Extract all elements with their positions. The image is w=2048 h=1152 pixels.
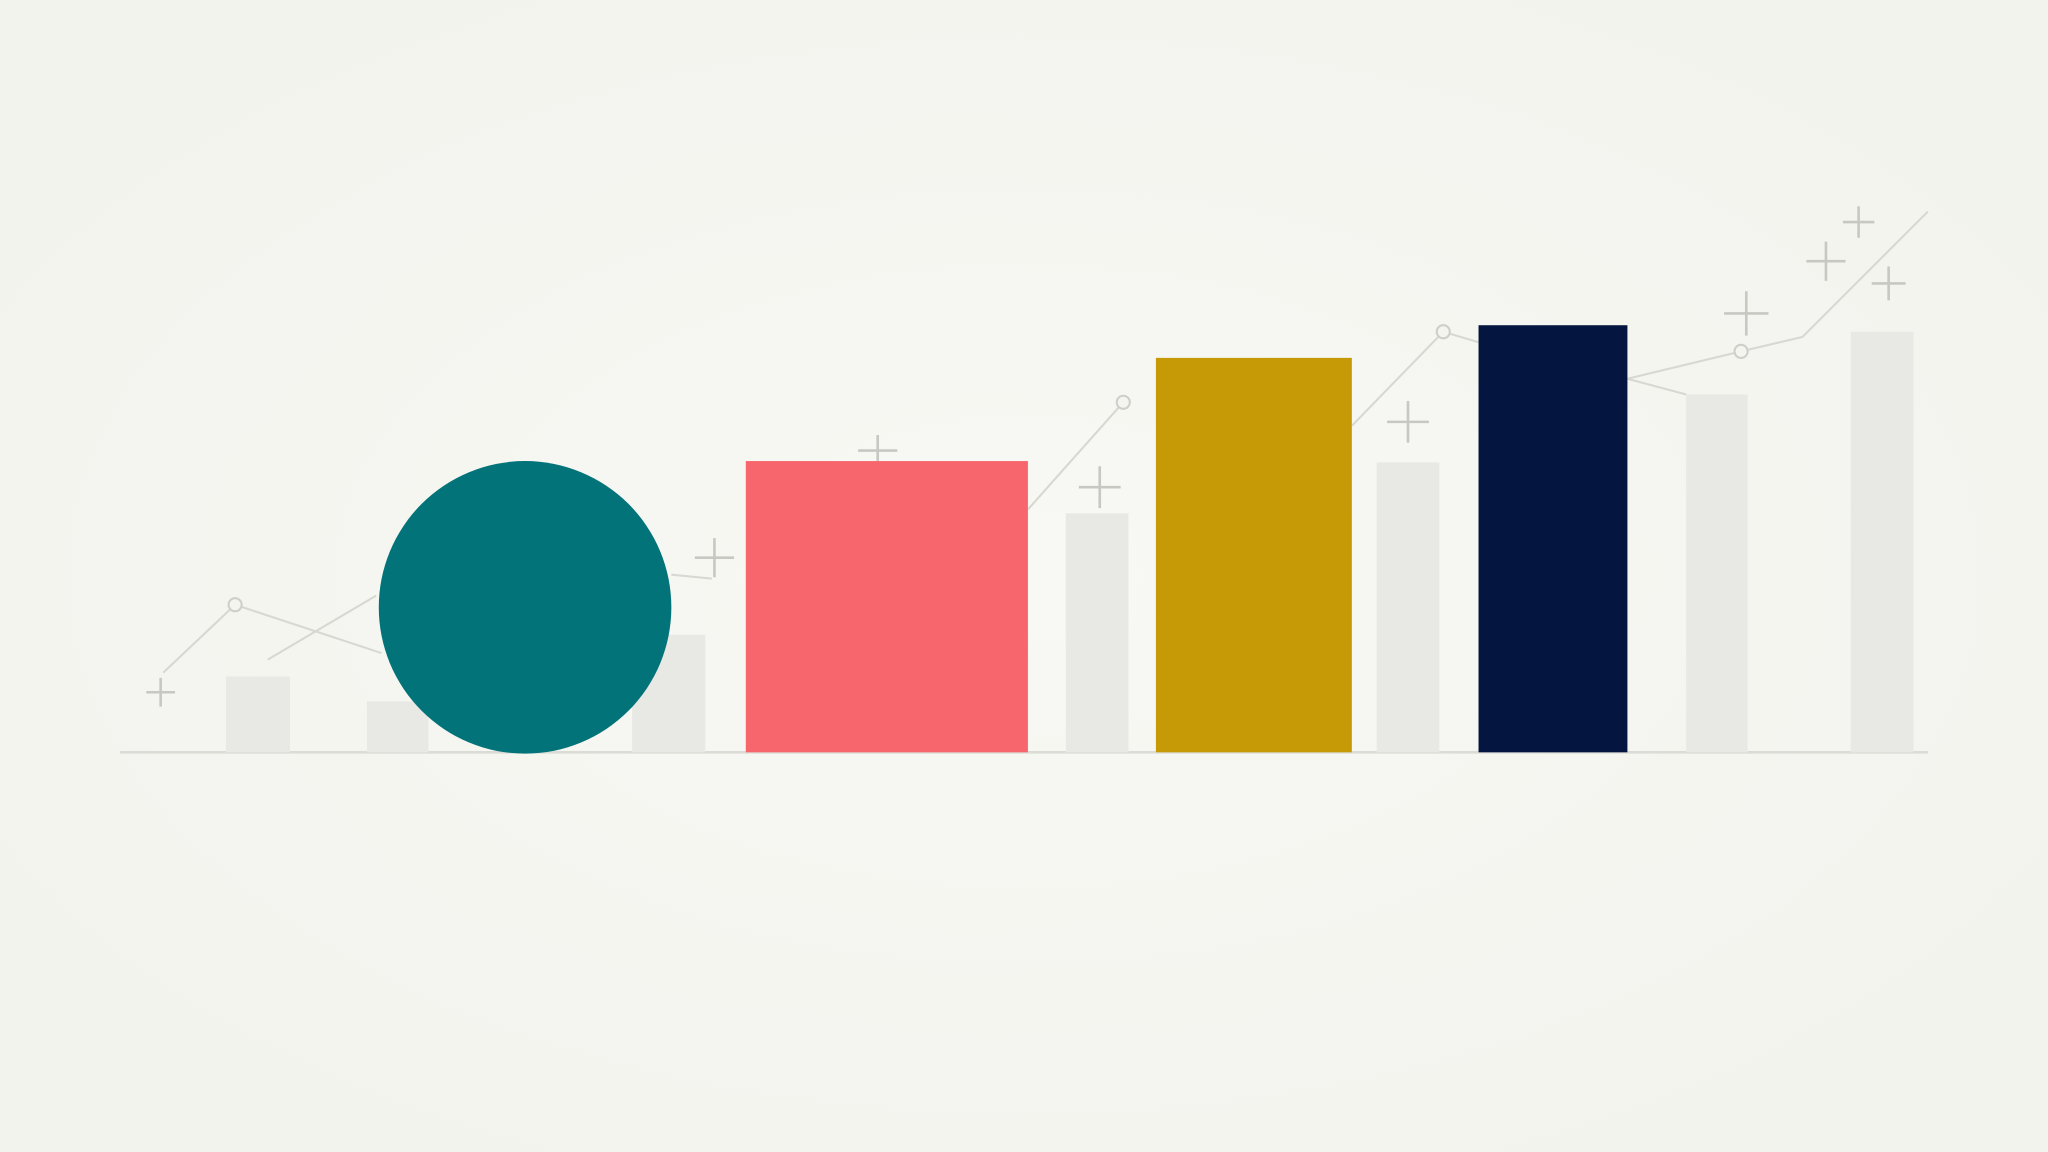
gray bars <box>226 332 1913 752</box>
navy bar <box>1479 325 1627 752</box>
trend lines <box>163 212 1928 673</box>
teal circle <box>379 461 671 754</box>
baseline <box>120 751 1928 753</box>
red bar <box>746 461 1028 752</box>
plus marks <box>146 206 1906 707</box>
nodes <box>229 325 1748 611</box>
gold bar <box>1156 358 1352 752</box>
